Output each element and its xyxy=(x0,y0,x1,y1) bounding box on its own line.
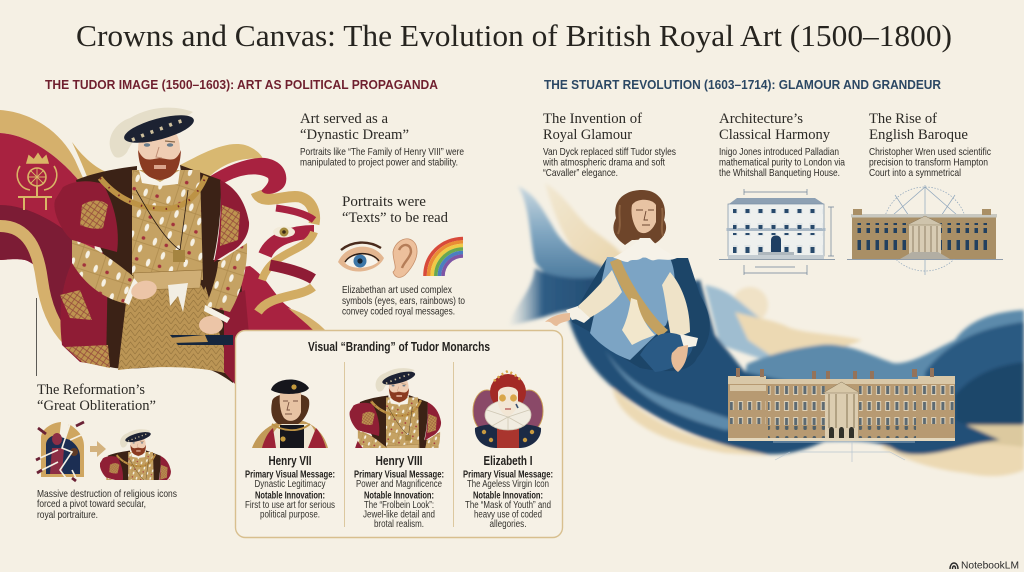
name and captions: Henry VII: Dynastic Legitimacy xyxy=(254,479,326,490)
name and captions: Henry VII: First to use art for serious xyxy=(245,500,335,511)
text: Reformation description: Massive destruction of religious icons xyxy=(37,489,177,500)
name and captions: Henry VIII: The “Frolbein Look”: xyxy=(364,500,434,511)
icon: rainbow xyxy=(425,238,463,276)
panel: lower Reformation section xyxy=(36,298,177,530)
text block: Invention of Royal Glamour: with atmospheric drama and soft xyxy=(542,158,665,168)
name and captions: Elizabeth I: allegories. xyxy=(490,519,526,530)
name and captions: Elizabeth I: Notable Innovation: xyxy=(473,490,543,502)
name and captions: Henry VIII: Notable Innovation: xyxy=(364,490,434,502)
illustration: Hampton Court palace xyxy=(728,368,955,462)
text: Reformation description: forced a pivot toward secular, xyxy=(37,499,146,510)
text: Elizabethan symbols: symbols (eyes, ears, rainbows) to xyxy=(342,296,465,307)
column: Henry VII xyxy=(245,380,335,520)
name and captions: Elizabeth I: The Ageless Virgin Icon xyxy=(467,479,549,490)
text block: English Baroque: precision to transform Hampton xyxy=(869,158,988,168)
name and captions: Elizabeth I: The “Mask of Youth” and xyxy=(465,500,551,511)
text block: Classical Harmony xyxy=(719,110,845,179)
arrow xyxy=(90,441,106,457)
portrait: Elizabeth I xyxy=(473,371,543,448)
heading and text: Dynastic Dream xyxy=(300,110,464,168)
name and captions: Henry VII: Henry VII xyxy=(268,454,312,468)
illustration: Hampton Court with geometric overlay xyxy=(847,185,1003,275)
logo: NotebookLM: NotebookLM xyxy=(961,560,1019,572)
name and captions: Elizabeth I: Primary Visual Message: xyxy=(463,470,553,480)
column: Elizabeth I xyxy=(463,371,553,530)
text block: English Baroque: English Baroque xyxy=(869,126,968,143)
heading: Great Obliteration: The Reformation’s xyxy=(37,381,145,398)
icon: ear xyxy=(393,239,417,277)
name and captions: Elizabeth I xyxy=(463,454,553,530)
name and captions: Henry VIII: brotal realism. xyxy=(374,519,424,530)
text block: Invention of Royal Glamour: “Cavaller” elegance. xyxy=(543,168,618,179)
heading: Portraits were Texts: Portraits were xyxy=(342,193,426,210)
name and captions: Henry VII: Primary Visual Message: xyxy=(245,470,335,480)
heading: Stuart section: THE STUART REVOLUTION (1603–1714): GLAMOUR AND GRANDEUR xyxy=(544,78,941,92)
ribbon with eye symbol xyxy=(205,158,315,312)
heading and text: Dynastic Dream: manipulated to project power and stability. xyxy=(300,158,458,168)
heading and text: Dynastic Dream: Art served as a xyxy=(300,110,388,127)
title: Crowns and Canvas: The Evolution of British Royal Art (1500–1800) xyxy=(76,18,952,53)
name and captions: Henry VIII xyxy=(354,454,444,530)
text: Elizabethan symbols: convey coded royal messages. xyxy=(342,306,455,318)
icon: Tudor crown emblem xyxy=(17,154,57,210)
figure: Henry VIII bust (small) xyxy=(100,429,171,480)
heading and text: Dynastic Dream: “Dynastic Dream” xyxy=(300,126,409,143)
illustration: Banqueting House elevation xyxy=(719,189,835,275)
heading: Great Obliteration xyxy=(37,381,156,414)
text: Elizabethan symbols: Elizabethan art used complex xyxy=(342,285,452,296)
panel: Visual Branding of Tudor Monarchs xyxy=(236,330,562,538)
name and captions: Henry VIII: Power and Magnificence xyxy=(356,479,442,490)
heading: Portraits were Texts xyxy=(342,193,448,226)
text block: Invention of Royal Glamour xyxy=(542,110,676,179)
portrait: Henry VIII bust xyxy=(350,368,442,448)
text block: Classical Harmony: Inigo Jones introduced Palladian xyxy=(719,147,839,158)
painted blue and cream flow xyxy=(508,183,1024,476)
heading: Portraits were Texts: “Texts” to be read xyxy=(342,209,448,226)
icon: blue eye xyxy=(338,243,384,272)
name and captions: Henry VII xyxy=(245,454,335,520)
crimson and gold banner behind Henry VIII xyxy=(0,110,326,345)
panel heading: Visual “Branding” of Tudor Monarchs xyxy=(308,340,490,354)
text: Elizabethan symbols xyxy=(342,285,465,318)
name and captions: Henry VIII: Henry VIII xyxy=(376,454,422,468)
heading and text: Dynastic Dream: Portraits like “The Family of Henry VIII” were xyxy=(300,147,464,158)
text block: Invention of Royal Glamour: Royal Glamour xyxy=(543,126,632,143)
text block: English Baroque: The Rise of xyxy=(869,110,938,127)
figure: Van Dyck cavalier xyxy=(545,190,710,372)
text: Reformation description: royal portraiture. xyxy=(37,510,98,521)
name and captions: Henry VII: Notable Innovation: xyxy=(255,490,325,502)
icon: shattered religious icon xyxy=(36,422,88,482)
heading: Tudor section: THE TUDOR IMAGE (1500–1603): ART AS POLITICAL PROPAGANDA xyxy=(45,78,438,92)
text block: Classical Harmony: Architecture’s xyxy=(719,110,803,127)
text block: Invention of Royal Glamour: The Invention of xyxy=(543,110,643,127)
text block: Classical Harmony: mathematical purity to London via xyxy=(719,158,845,168)
heading: Great Obliteration: “Great Obliteration” xyxy=(37,397,156,414)
name and captions: Elizabeth I: Elizabeth I xyxy=(484,454,532,468)
name and captions: Henry VIII: Jewel-like detail and xyxy=(363,510,435,520)
text block: English Baroque xyxy=(869,110,991,179)
text block: Classical Harmony: Classical Harmony xyxy=(719,126,830,143)
figure: Henry VIII portrait xyxy=(54,108,250,384)
name and captions: Elizabeth I: heavy use of coded xyxy=(474,510,542,520)
icon: eye in ribbon xyxy=(273,226,295,238)
column: Henry VIII xyxy=(350,368,444,530)
text block: Classical Harmony: the Whitshall Banqueting House. xyxy=(719,168,840,179)
name and captions: Henry VII: political purpose. xyxy=(260,510,320,520)
text block: English Baroque: Court into a symmetrical xyxy=(869,168,961,179)
text block: Invention of Royal Glamour: Van Dyck replaced stiff Tudor styles xyxy=(543,147,676,158)
name and captions: Henry VIII: Primary Visual Message: xyxy=(354,470,444,480)
text: Reformation description xyxy=(37,489,177,521)
text block: English Baroque: Christopher Wren used scientific xyxy=(869,147,991,158)
portrait: Henry VII xyxy=(252,380,328,448)
